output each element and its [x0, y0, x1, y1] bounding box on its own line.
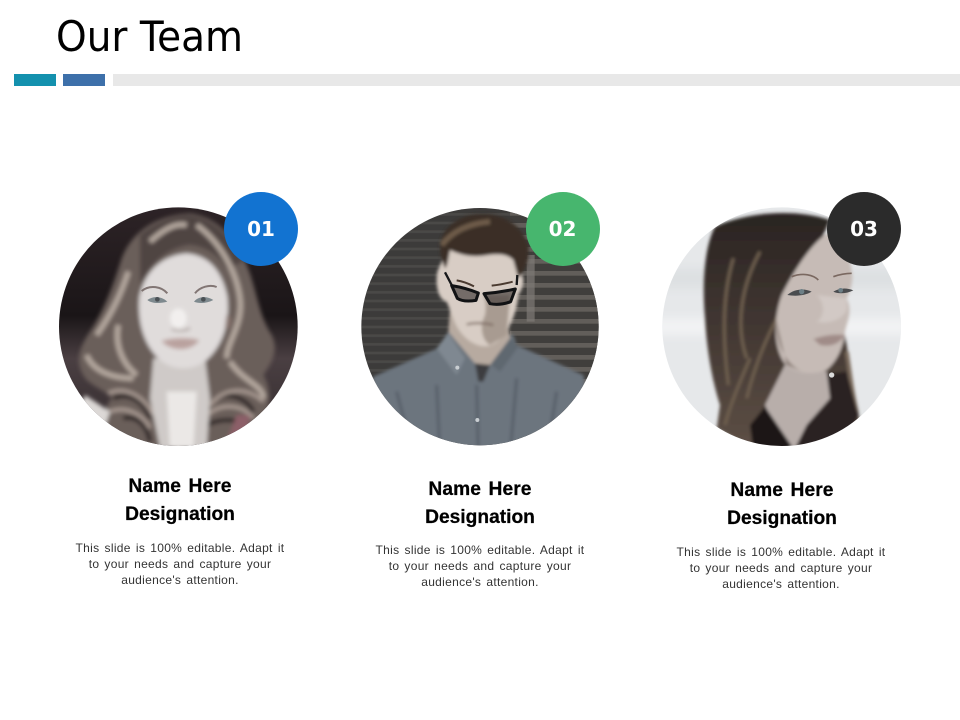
badge: 03: 03 — [850, 217, 878, 241]
description: This slide is 100% editable. Adapt it — [376, 543, 584, 557]
name — [727, 480, 837, 529]
title: Our Team — [56, 12, 243, 61]
name — [425, 479, 535, 528]
header bar: blue segment — [63, 74, 105, 86]
header bar: grey track — [113, 74, 960, 86]
badge: 01 — [224, 192, 298, 266]
name — [125, 476, 235, 525]
description — [376, 543, 584, 589]
name: Designation — [727, 508, 837, 529]
name: Name Here — [428, 479, 532, 500]
name: Designation — [425, 507, 535, 528]
panel: team member 02 — [361, 192, 600, 589]
name: Name Here — [730, 480, 834, 501]
badge: 02: 02 — [549, 217, 576, 241]
description — [676, 545, 885, 591]
photo: man with glasses — [361, 208, 599, 446]
description: This slide is 100% editable. Adapt it — [677, 545, 885, 559]
description: This slide is 100% editable. Adapt it — [76, 541, 284, 555]
name: Name Here — [128, 476, 232, 497]
header bar: teal segment — [14, 74, 56, 86]
name: Designation — [125, 504, 235, 525]
description — [76, 541, 284, 587]
description: to your needs and capture your — [690, 561, 872, 575]
photo: woman in profile with long hair — [662, 208, 901, 446]
badge: 02 — [526, 192, 600, 266]
photo: woman with curly hair — [59, 207, 298, 446]
badge: 03 — [827, 192, 901, 266]
description: to your needs and capture your — [89, 557, 271, 571]
description: to your needs and capture your — [389, 559, 571, 573]
badge: 01: 01 — [247, 217, 275, 241]
description: audience's attention. — [722, 577, 840, 591]
panel: team member 01 — [59, 192, 298, 587]
panel: team member 03 — [662, 192, 901, 591]
description: audience's attention. — [421, 575, 539, 589]
description: audience's attention. — [121, 573, 239, 587]
